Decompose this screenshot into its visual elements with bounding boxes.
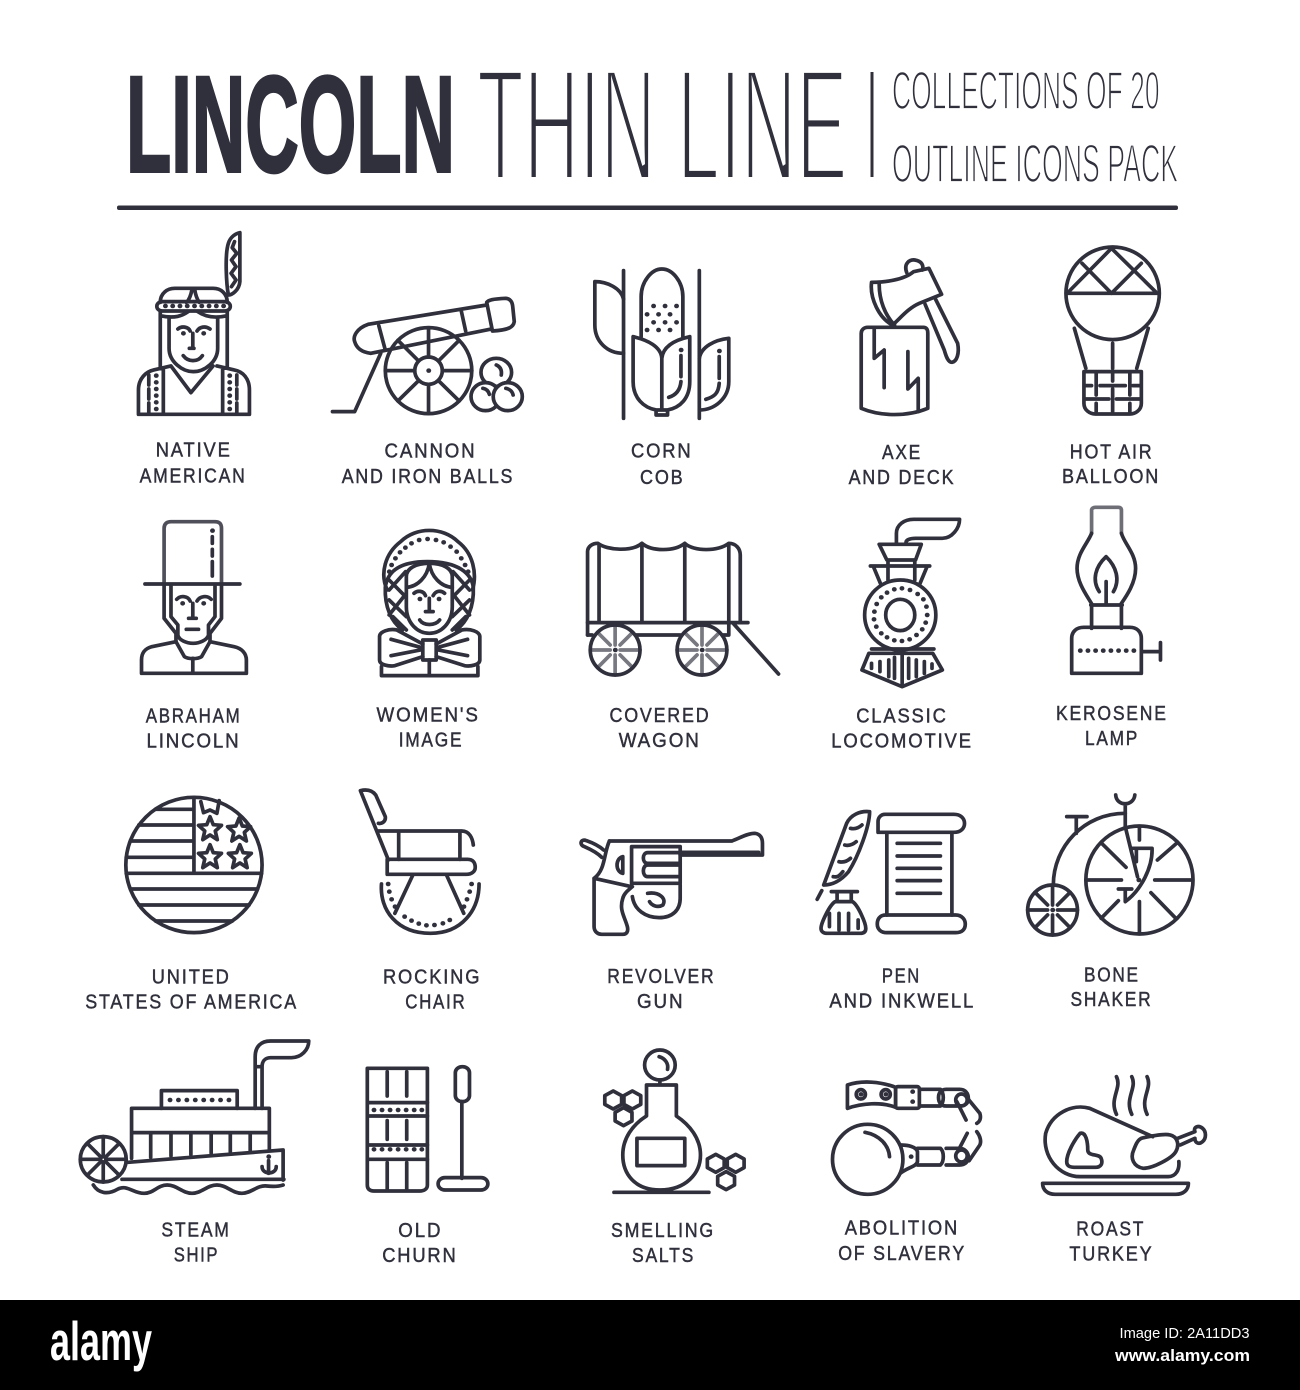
- label: corn cob: COB: [640, 467, 684, 489]
- item: abraham lincoln: [142, 522, 246, 752]
- label: bone shaker: BONE: [1084, 965, 1140, 987]
- label: roast turkey: [1069, 1219, 1154, 1266]
- label: hot air balloon: HOT AIR: [1070, 441, 1154, 463]
- label: bone shaker: [1070, 965, 1152, 1011]
- icon: classic locomotive: [862, 519, 960, 687]
- label: revolver gun: REVOLVER: [607, 966, 715, 988]
- label: revolver gun: [607, 966, 715, 1013]
- icon: revolver: [581, 833, 762, 934]
- label: old churn: CHURN: [382, 1245, 458, 1267]
- icon: butter churn: [367, 1067, 488, 1191]
- item: pen and inkwell: [817, 812, 975, 1012]
- title header: [126, 35, 1178, 214]
- divider bar: [870, 72, 874, 177]
- icon: hot air balloon: [1066, 247, 1159, 414]
- item: old churn: [367, 1067, 488, 1267]
- label: rocking chair: [383, 966, 481, 1013]
- label: pen and inkwell: AND INKWELL: [829, 990, 975, 1012]
- label: hot air balloon: [1062, 441, 1160, 488]
- label: steam ship: STEAM: [161, 1220, 231, 1242]
- label: revolver gun: GUN: [637, 991, 684, 1013]
- label: rocking chair: ROCKING: [383, 966, 481, 988]
- item: native american: [138, 233, 249, 487]
- icon: ball and chain: [832, 1082, 981, 1194]
- label: cannon and iron balls: AND IRON BALLS: [342, 466, 514, 488]
- label: roast turkey: ROAST: [1076, 1219, 1145, 1241]
- label: old churn: [382, 1220, 458, 1267]
- icon: abraham lincoln: [142, 522, 246, 673]
- footer bar: [0, 1300, 1300, 1390]
- label: old churn: OLD: [398, 1220, 442, 1242]
- item: kerosene lamp: [1056, 507, 1168, 750]
- label: cannon and iron balls: [342, 440, 514, 488]
- label: kerosene lamp: KEROSENE: [1056, 703, 1168, 725]
- label: united states of america: STATES OF AMERICA: [85, 991, 298, 1013]
- icon: american flag circle: [126, 797, 262, 933]
- item: cannon: [332, 298, 522, 488]
- icon: axe and deck: [861, 260, 958, 415]
- label: abraham lincoln: LINCOLN: [146, 730, 240, 752]
- label: corn cob: [631, 440, 692, 489]
- heading: Lincoln: LINCOLN: [126, 48, 455, 202]
- subtitle: outline icons pack: OUTLINE ICONS PACK: [892, 134, 1178, 195]
- image id: Image ID: 2A11DD3: [1120, 1325, 1250, 1342]
- label: classic locomotive: CLASSIC: [856, 705, 948, 727]
- label: classic locomotive: [831, 705, 973, 752]
- icon: corn cob: [595, 269, 729, 418]
- label: native american: [140, 440, 247, 487]
- icon: native american: [138, 233, 249, 414]
- icon: smelling salts bottle: [605, 1050, 744, 1192]
- website address: www.alamy.com: [1114, 1346, 1250, 1365]
- footer logo: alamy: alamy: [50, 1310, 152, 1372]
- icon: paddle steamship: [80, 1041, 309, 1193]
- item: united states of america: [85, 797, 298, 1013]
- item: covered wagon: [588, 543, 779, 752]
- label: cannon and iron balls: CANNON: [384, 440, 476, 462]
- label: covered wagon: [610, 705, 710, 752]
- label: kerosene lamp: [1056, 703, 1168, 750]
- subtitle: collections of 20: COLLECTIONS OF 20: [892, 62, 1160, 122]
- label: rocking chair: CHAIR: [405, 991, 466, 1013]
- icon: woman in bonnet: [380, 530, 480, 676]
- label: covered wagon: COVERED: [610, 705, 710, 727]
- item: steam ship: [80, 1041, 309, 1267]
- label: pen and inkwell: PEN: [882, 965, 921, 987]
- label: smelling salts: SALTS: [632, 1245, 695, 1267]
- label: abolition of slavery: ABOLITION: [845, 1217, 959, 1239]
- label: axe and deck: AND DECK: [849, 467, 955, 489]
- item: hot air balloon: [1062, 247, 1160, 488]
- label: abraham lincoln: ABRAHAM: [146, 705, 241, 727]
- label: united states of america: UNITED: [152, 966, 231, 988]
- label: native american: NATIVE: [156, 440, 232, 462]
- item: classic locomotive: [831, 519, 973, 752]
- label: smelling salts: [611, 1220, 715, 1267]
- label: corn cob: CORN: [631, 440, 692, 462]
- label: smelling salts: SMELLING: [611, 1220, 715, 1242]
- label: pen and inkwell: [829, 965, 975, 1012]
- label: bone shaker: SHAKER: [1070, 989, 1152, 1011]
- label: kerosene lamp: LAMP: [1085, 728, 1139, 750]
- label: women's image: [376, 705, 480, 752]
- item: bone shaker: [1028, 795, 1193, 1011]
- item: corn cob: [595, 269, 729, 489]
- label: covered wagon: WAGON: [619, 730, 701, 752]
- icon: roast turkey: [1043, 1077, 1205, 1194]
- item: abolition of slavery: [832, 1082, 981, 1265]
- label: hot air balloon: BALLOON: [1062, 466, 1160, 488]
- label: native american: AMERICAN: [140, 465, 247, 487]
- label: steam ship: SHIP: [174, 1245, 219, 1267]
- label: steam ship: [161, 1220, 231, 1267]
- label: abraham lincoln: [146, 705, 241, 752]
- item: roast turkey: [1043, 1077, 1205, 1266]
- label: united states of america: [85, 966, 298, 1013]
- item: revolver gun: [581, 833, 762, 1013]
- label: women's image: WOMEN'S: [376, 705, 480, 727]
- heading: Thin Line: THIN LINE: [477, 35, 847, 214]
- icon: quill, inkwell and scroll: [817, 812, 965, 933]
- icon: rocking chair: [360, 790, 479, 933]
- item: axe and deck: [849, 260, 958, 489]
- item: women's image: [376, 530, 480, 752]
- label: roast turkey: TURKEY: [1069, 1244, 1154, 1266]
- label: axe and deck: [849, 442, 955, 489]
- label: women's image: IMAGE: [399, 730, 463, 752]
- label: abolition of slavery: OF SLAVERY: [838, 1243, 966, 1265]
- label: axe and deck: AXE: [882, 442, 922, 464]
- item: smelling salts: [605, 1050, 744, 1267]
- item: rocking chair: [360, 790, 481, 1013]
- icon: penny farthing bicycle: [1028, 795, 1193, 935]
- label: classic locomotive: LOCOMOTIVE: [831, 730, 973, 752]
- label: abolition of slavery: [838, 1217, 966, 1265]
- icon: kerosene lamp: [1072, 507, 1160, 673]
- icon: cannon and iron balls: [332, 298, 522, 414]
- icon: covered wagon: [588, 543, 779, 675]
